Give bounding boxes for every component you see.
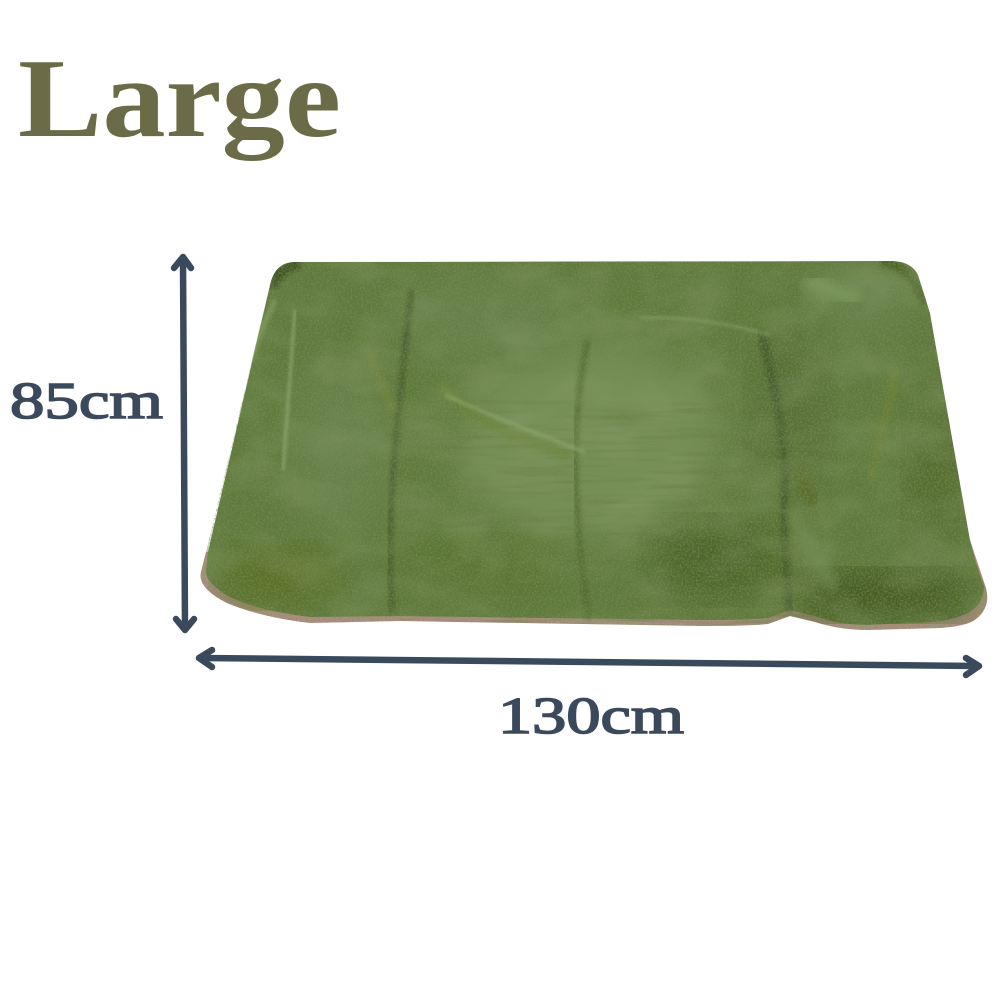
blanket pink trim — [201, 540, 987, 630]
blanket surface — [200, 260, 990, 630]
label: height: 85cm — [10, 373, 163, 430]
olive patches — [458, 404, 570, 460]
arrow: height — [174, 257, 194, 630]
fold highlights — [283, 310, 295, 470]
corner shadows — [272, 263, 300, 288]
infographic canvas — [12, 62, 988, 734]
arrow: width — [199, 650, 979, 675]
photo: green blanket — [200, 260, 990, 630]
seams — [390, 290, 412, 612]
title: Large — [18, 37, 341, 161]
label: width: 130cm — [498, 688, 684, 745]
